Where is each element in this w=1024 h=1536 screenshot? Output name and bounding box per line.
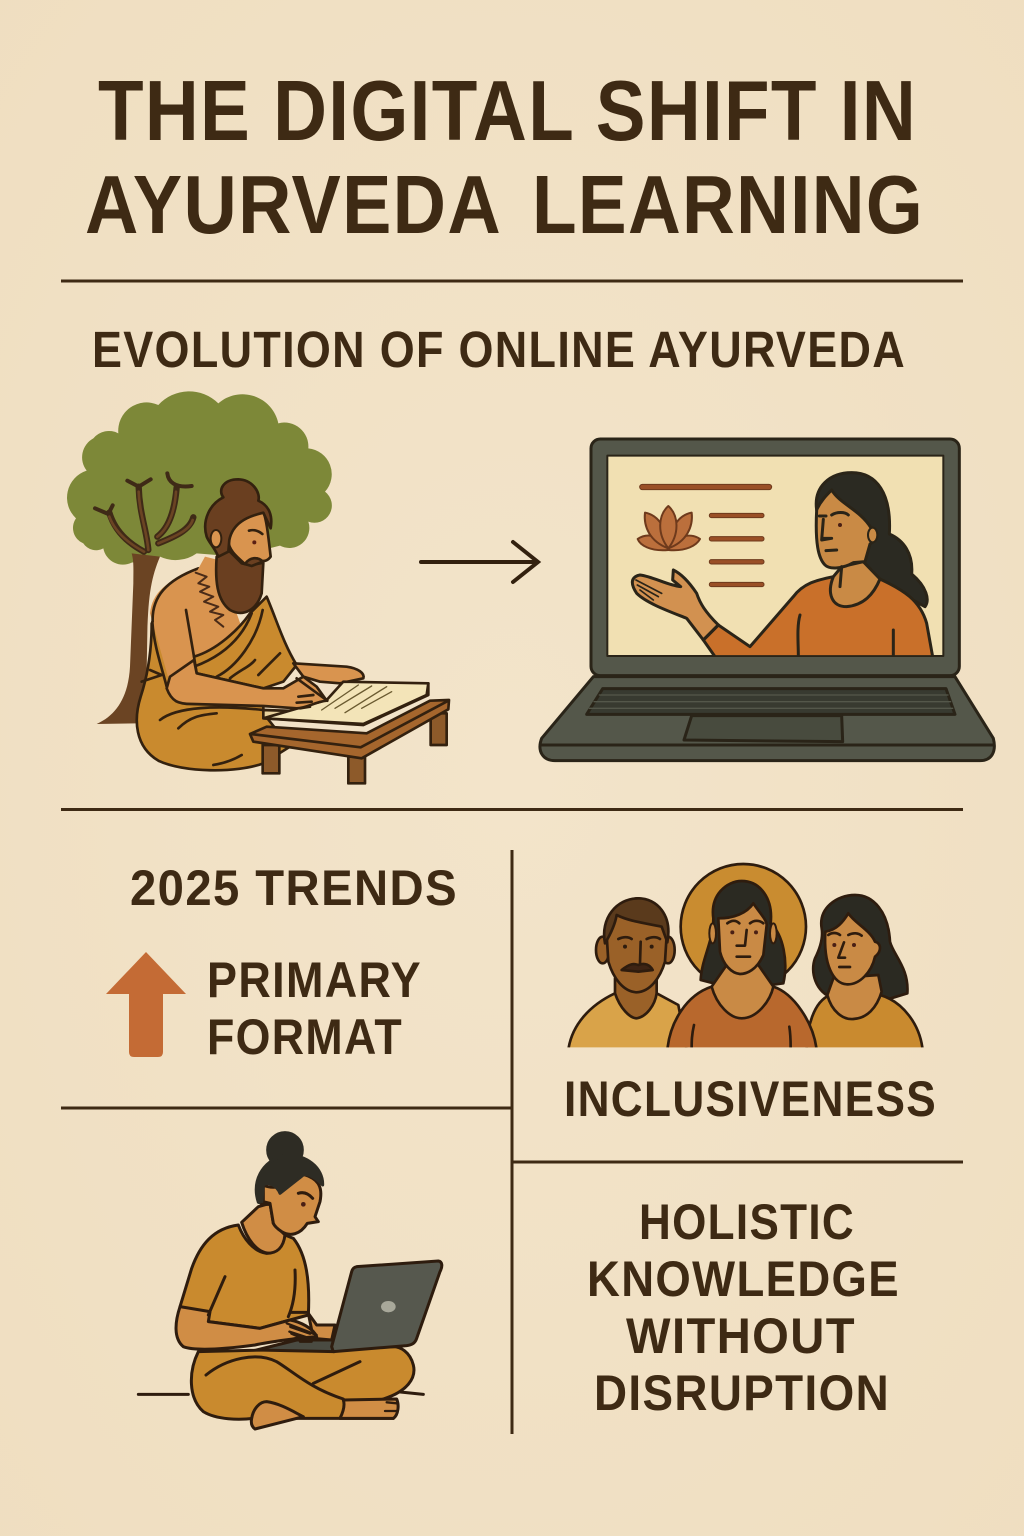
trackpad [684,716,843,742]
moustache [245,558,263,566]
laptop [257,1340,334,1352]
centre woman [667,881,817,1050]
arrow [421,542,538,582]
label: inclusiveness: INCLUSIVENESS [564,1071,937,1127]
laptop lid [591,439,959,676]
hair and topknot [205,479,271,557]
beard [216,550,263,613]
teacher hair [816,473,927,607]
book [263,683,428,725]
label: holistic knowledge without disruption: HOLISTIC [639,1194,855,1250]
icon: three diverse people [568,864,923,1050]
halo [681,864,806,989]
label: primary format: FORMAT [207,1009,403,1065]
ear [211,530,221,547]
back hand [308,1313,335,1340]
low table [250,700,449,783]
lotus icon [638,506,700,550]
icon: student with laptop [138,1133,442,1429]
screen [607,456,943,656]
man [568,898,687,1050]
head [263,1174,321,1234]
icon: up arrow [106,952,186,1057]
subheading: 2025 trends: 2025 TRENDS [130,860,458,916]
neck [242,1203,285,1253]
laptop base [540,677,994,761]
torso [150,563,263,703]
face [228,512,271,564]
right woman [807,895,923,1050]
hair [256,1133,323,1203]
tree canopy [67,391,332,565]
feet [340,1399,398,1418]
teacher hand and arm [632,570,718,640]
title: AYURVEDA [85,158,502,251]
label: holistic knowledge without disruption: DISRUPTION [594,1365,890,1421]
label: holistic knowledge without disruption: KNOWLEDGE [587,1251,900,1307]
student face [262,1193,313,1204]
heading: evolution: EVOLUTION OF ONLINE AYURVEDA [92,321,906,378]
legs [191,1347,414,1419]
logo [381,1301,396,1312]
title: THE DIGITAL SHIFT IN [98,64,917,159]
label: holistic knowledge without disruption: WITHOUT [626,1308,856,1364]
drape [194,597,297,688]
torso [180,1225,309,1328]
far arm [293,663,364,683]
title: LEARNING [532,158,924,251]
slide lines [640,484,772,587]
label: primary format [207,952,422,1065]
teacher face [816,490,876,568]
teacher neck [830,562,880,607]
keyboard [587,689,955,714]
label: holistic knowledge without disruption [587,1194,900,1421]
title [85,64,924,251]
neck [197,557,232,627]
arm with hand and stylus [167,660,327,708]
lower robe [137,623,290,770]
tree trunk [95,473,193,724]
sacred thread [196,573,223,627]
arm [176,1307,317,1349]
face details [249,530,262,534]
floor lines [138,1392,423,1394]
icon: sage writing under tree [67,391,449,783]
label: primary format: PRIMARY [207,952,422,1008]
teacher shirt [703,577,933,657]
icon: laptop with online teacher [540,439,994,761]
